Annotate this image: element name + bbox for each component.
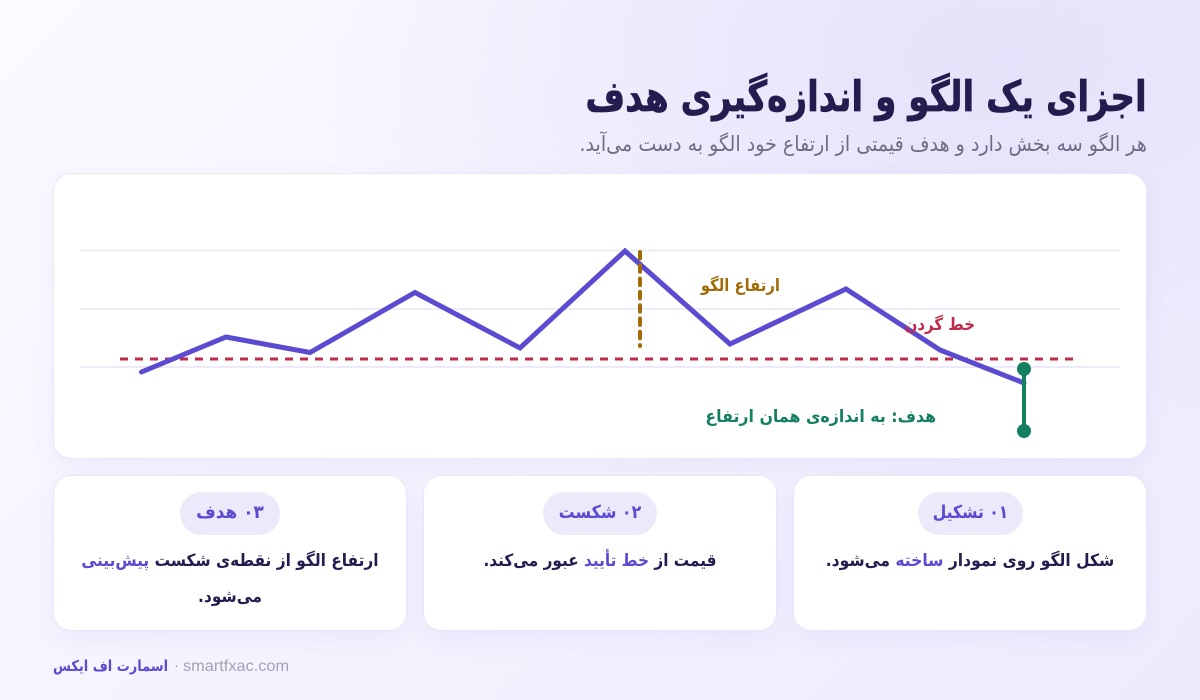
- panel: chart: [53, 173, 1147, 459]
- card 1 text: شکل الگو روی نمودار ساخته می‌شود.: [826, 551, 1114, 571]
- subtitle: هر الگو سه بخش دارد و هدف قیمتی از ارتفاع خود الگو به دست می‌آید.: [580, 132, 1147, 156]
- target marker: [1017, 362, 1031, 438]
- price line: [142, 251, 1024, 383]
- label: target: هدف: به اندازه‌ی همان ارتفاع: [705, 407, 936, 427]
- card 3 text line 2: می‌شود.: [198, 587, 262, 607]
- card 2 text: قیمت از خط تأیید عبور می‌کند.: [483, 551, 716, 571]
- pill 1: [918, 492, 1023, 535]
- card 3 text line 1: ارتفاع الگو از نقطه‌ی شکست پیش‌بینی: [81, 551, 379, 571]
- pattern height marker: [638, 252, 642, 346]
- pill text 2: ۰۲ شکست: [559, 502, 641, 523]
- pill 2: [543, 492, 657, 535]
- label: neckline: خط گردن: [905, 315, 975, 335]
- pill text 1: ۰۱ تشکیل: [933, 502, 1008, 523]
- footer url: smartfxac.com: [183, 658, 289, 675]
- pill 3: [180, 492, 280, 535]
- card 1: formation: [793, 475, 1147, 631]
- neckline: [120, 358, 1075, 360]
- footer brand: اسمارت اف ایکس: [53, 657, 168, 675]
- footer separator: ·: [174, 657, 179, 674]
- pill text 3: ۰۳ هدف: [196, 502, 264, 523]
- card 2: breakout: [423, 475, 777, 631]
- card 3: target: [53, 475, 407, 631]
- title: اجزای یک الگو و اندازه‌گیری هدف: [586, 72, 1147, 121]
- label: pattern height: ارتفاع الگو: [701, 276, 780, 296]
